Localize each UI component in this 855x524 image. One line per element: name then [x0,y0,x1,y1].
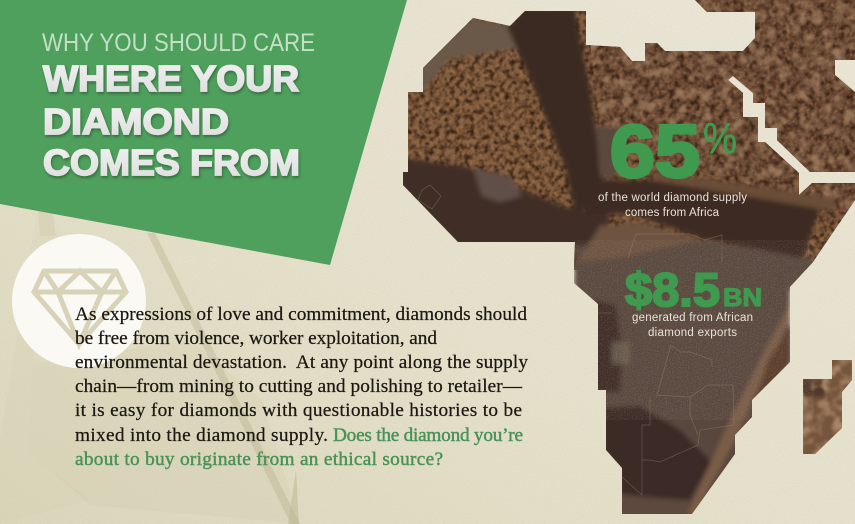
photo shapes [400,8,855,524]
map of Africa filled with mining photo [400,0,855,524]
icon: diamond in circle [12,234,146,368]
body paragraph: Does the diamond you’re [333,425,523,446]
body paragraph: mixed into the diamond supply. [75,425,328,446]
photo grain [574,240,855,460]
stat: 65%: 65 [610,110,700,193]
title: WHERE YOUR [43,58,299,99]
title: WHY YOU SHOULD CARE [42,29,315,57]
stat: 65% [598,110,747,219]
stat: $8.5BN: BN [723,284,762,312]
stat: $8.5BN [625,263,762,339]
body paragraph: it is easy for diamonds with questionable histories to be [75,400,522,421]
stat: $8.5BN: diamond exports [648,327,737,339]
green title panel [0,0,407,265]
background diamond shards [0,204,300,524]
title: DIAMOND [43,101,229,142]
body paragraph: environmental devastation. At any point along the supply [75,352,528,373]
body paragraph: about to buy originate from an ethical source? [75,449,443,470]
stat: 65%: % [703,114,737,163]
country borders [418,185,734,495]
stat: $8.5BN: generated from African [632,312,753,324]
body paragraph: be free from violence, worker exploitation, and [75,328,437,349]
body paragraph: As expressions of love and commitment, diamonds should [75,304,527,325]
stat: $8.5BN: $8.5 [625,263,720,316]
body paragraph [75,304,528,470]
title: COMES FROM [43,142,300,183]
title [42,29,315,183]
body paragraph: chain—from mining to cutting and polishing to retailer— [75,376,523,397]
stat: 65%: of the world diamond supply [598,192,747,204]
soil base [400,0,855,270]
stat: 65%: comes from Africa [625,207,720,219]
